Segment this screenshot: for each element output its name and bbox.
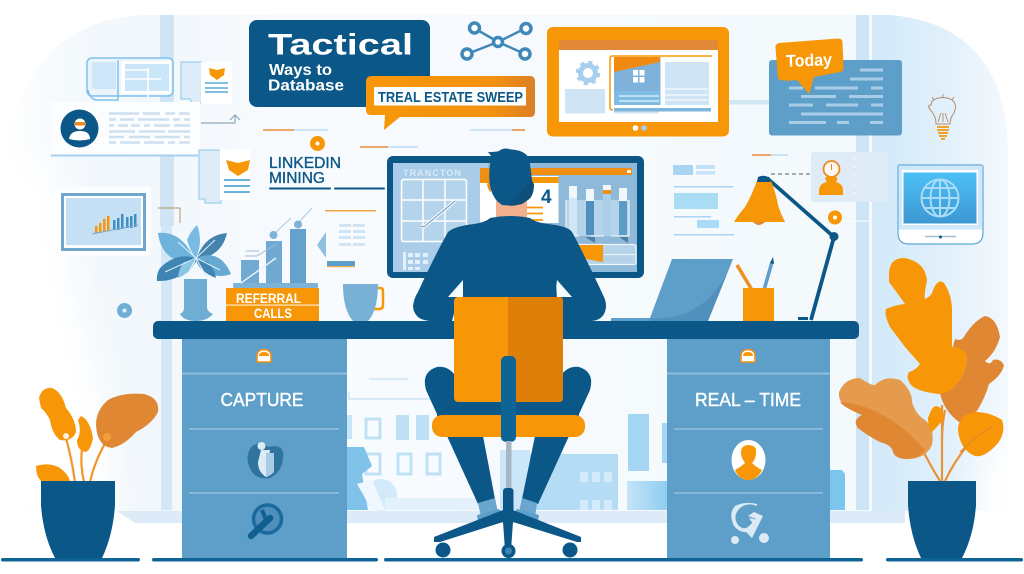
- left potted plant: [36, 388, 158, 558]
- monitor with globe: [898, 165, 983, 244]
- wall chart card: [55, 187, 151, 256]
- top leaf: [886, 258, 967, 394]
- profile text lines: [109, 114, 190, 142]
- heading: LinkedIn Mining: MINING: [269, 170, 325, 187]
- tablet card: [610, 56, 712, 114]
- screen lower panel: [560, 244, 636, 264]
- book stack: referral calls: REFERRAL: [236, 291, 301, 306]
- heading: LinkedIn Mining: [269, 155, 385, 190]
- speech bubble: real estate sweep: [366, 76, 535, 130]
- icon: person shield: [248, 442, 283, 478]
- small leaves: [928, 406, 1003, 456]
- calendar grid: [402, 180, 466, 242]
- heading: LinkedIn Mining: LINKEDIN: [269, 155, 341, 172]
- icon: orange person badge: [732, 440, 766, 480]
- title box: Database: [268, 78, 344, 94]
- right desk drawer: REAL – TIME: [695, 389, 801, 410]
- device mockup top left: [87, 58, 173, 100]
- document icon with orange mark: [181, 62, 232, 104]
- decorative accent lines: [263, 130, 788, 155]
- dashed pointer: [771, 173, 811, 175]
- orange target dot: [310, 136, 325, 151]
- right potted plant: [839, 258, 1004, 558]
- left leaf: [839, 378, 933, 459]
- speech bubble: real estate sweep: TREAL ESTATE SWEEP: [378, 89, 523, 106]
- right desk drawer: [667, 339, 830, 558]
- potted palm: [157, 225, 231, 321]
- icon: drawer handle: [257, 350, 271, 362]
- gear icon: [578, 62, 598, 84]
- icon: light bulb: [929, 94, 956, 139]
- desk lamp: [734, 176, 838, 320]
- office chair: [432, 297, 585, 558]
- icon: drawer handle: [741, 350, 755, 362]
- keypad: [403, 252, 428, 270]
- chair back: [454, 297, 563, 402]
- seat: [432, 415, 585, 437]
- background city buildings: [347, 379, 845, 511]
- coffee mug: [343, 284, 383, 321]
- right leaf: [940, 316, 1004, 422]
- pot: [908, 481, 976, 558]
- stems: [920, 405, 968, 481]
- orange header bar: [480, 168, 632, 223]
- avatar: [60, 110, 98, 148]
- orange tablet: [547, 27, 729, 136]
- person seated: [413, 149, 606, 522]
- desk top: [153, 321, 859, 339]
- lap band: [437, 402, 579, 416]
- left desk drawer: CAPTURE: [220, 389, 304, 410]
- main monitor: TRANCTON: [403, 168, 461, 178]
- icon: globe: [922, 180, 958, 216]
- pencil cup: [737, 257, 774, 321]
- floor lines: [1, 558, 1023, 562]
- document icon 2: [199, 149, 250, 203]
- main monitor: [387, 156, 644, 278]
- laptop: [611, 259, 733, 321]
- screen bar chart: [566, 185, 629, 243]
- connector line: [718, 100, 770, 104]
- leaves: [36, 388, 158, 481]
- legs: [425, 367, 591, 504]
- icon: G shape: [731, 503, 769, 544]
- network icon: [462, 23, 531, 59]
- socks and shoes: [477, 498, 539, 522]
- chair spine: [501, 356, 516, 442]
- title box: Ways to: [269, 62, 332, 79]
- blue note card: [769, 60, 902, 136]
- small blue target dot: [117, 303, 132, 318]
- neck: [496, 195, 527, 222]
- profile card: [51, 102, 200, 156]
- chair base: [434, 488, 581, 558]
- title box: Tactical: [268, 28, 413, 62]
- desk bar chart: [233, 208, 318, 288]
- torso and arms: [413, 216, 606, 321]
- orange target dot right: [828, 210, 842, 224]
- hair and ears: [487, 149, 534, 206]
- arrow: [201, 115, 240, 123]
- orange header bar: 4: [541, 187, 552, 208]
- corner bracket: [158, 208, 180, 223]
- left desk drawer: [182, 339, 347, 558]
- clock and person panel: [811, 152, 888, 202]
- small wall document: [317, 210, 376, 267]
- wireframe list: [673, 165, 734, 236]
- speech bubble: today: Today: [786, 50, 833, 71]
- icon: magnifier: [251, 505, 282, 536]
- pot: [41, 481, 115, 558]
- book stack: referral calls: [226, 288, 319, 321]
- title box: [249, 20, 430, 107]
- chair pole: [506, 441, 512, 491]
- book stack: referral calls: CALLS: [254, 306, 292, 321]
- stems: [66, 438, 107, 482]
- speech bubble: today: [775, 38, 844, 94]
